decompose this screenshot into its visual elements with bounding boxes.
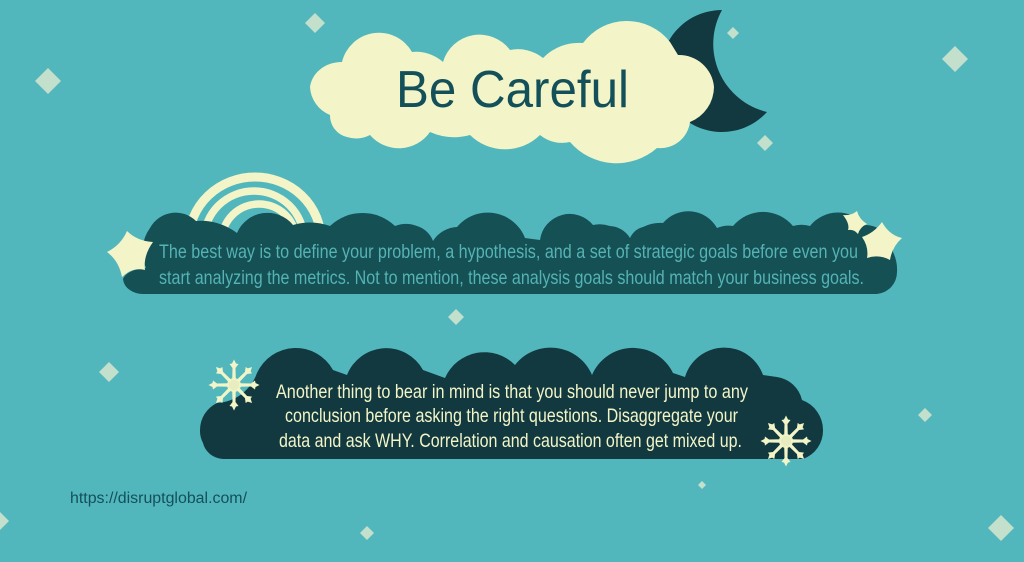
text: second message: data and ask WHY. Correlation and causation often get mixed up. [279,430,742,452]
icon: star left [107,231,153,277]
panel: second message cloud [200,348,823,459]
text: second message: Another thing to bear in mind is that you should never jump to any [276,381,748,403]
panel: first message cloud [123,211,897,294]
icon: big star right [862,222,902,260]
icon: crescent moon [661,10,767,132]
icon: rainbow [189,177,321,240]
text: first message: The best way is to define your problem, a hypothesis, and a set of strategic goals before even you [159,241,858,263]
text: second message [276,381,748,452]
text: first message: start analyzing the metrics. Not to mention, these analysis goals should match your business goals. [159,267,864,289]
icon: snowflake right [760,416,812,466]
icon: snowflake left [208,360,260,410]
icon: small star right [843,211,867,234]
source url: https://disruptglobal.com/ [70,490,248,507]
text: first message [159,241,864,289]
title: Be Careful [396,61,629,119]
text: second message: conclusion before asking the right questions. Disaggregate your [285,405,738,427]
title cloud [310,21,714,163]
